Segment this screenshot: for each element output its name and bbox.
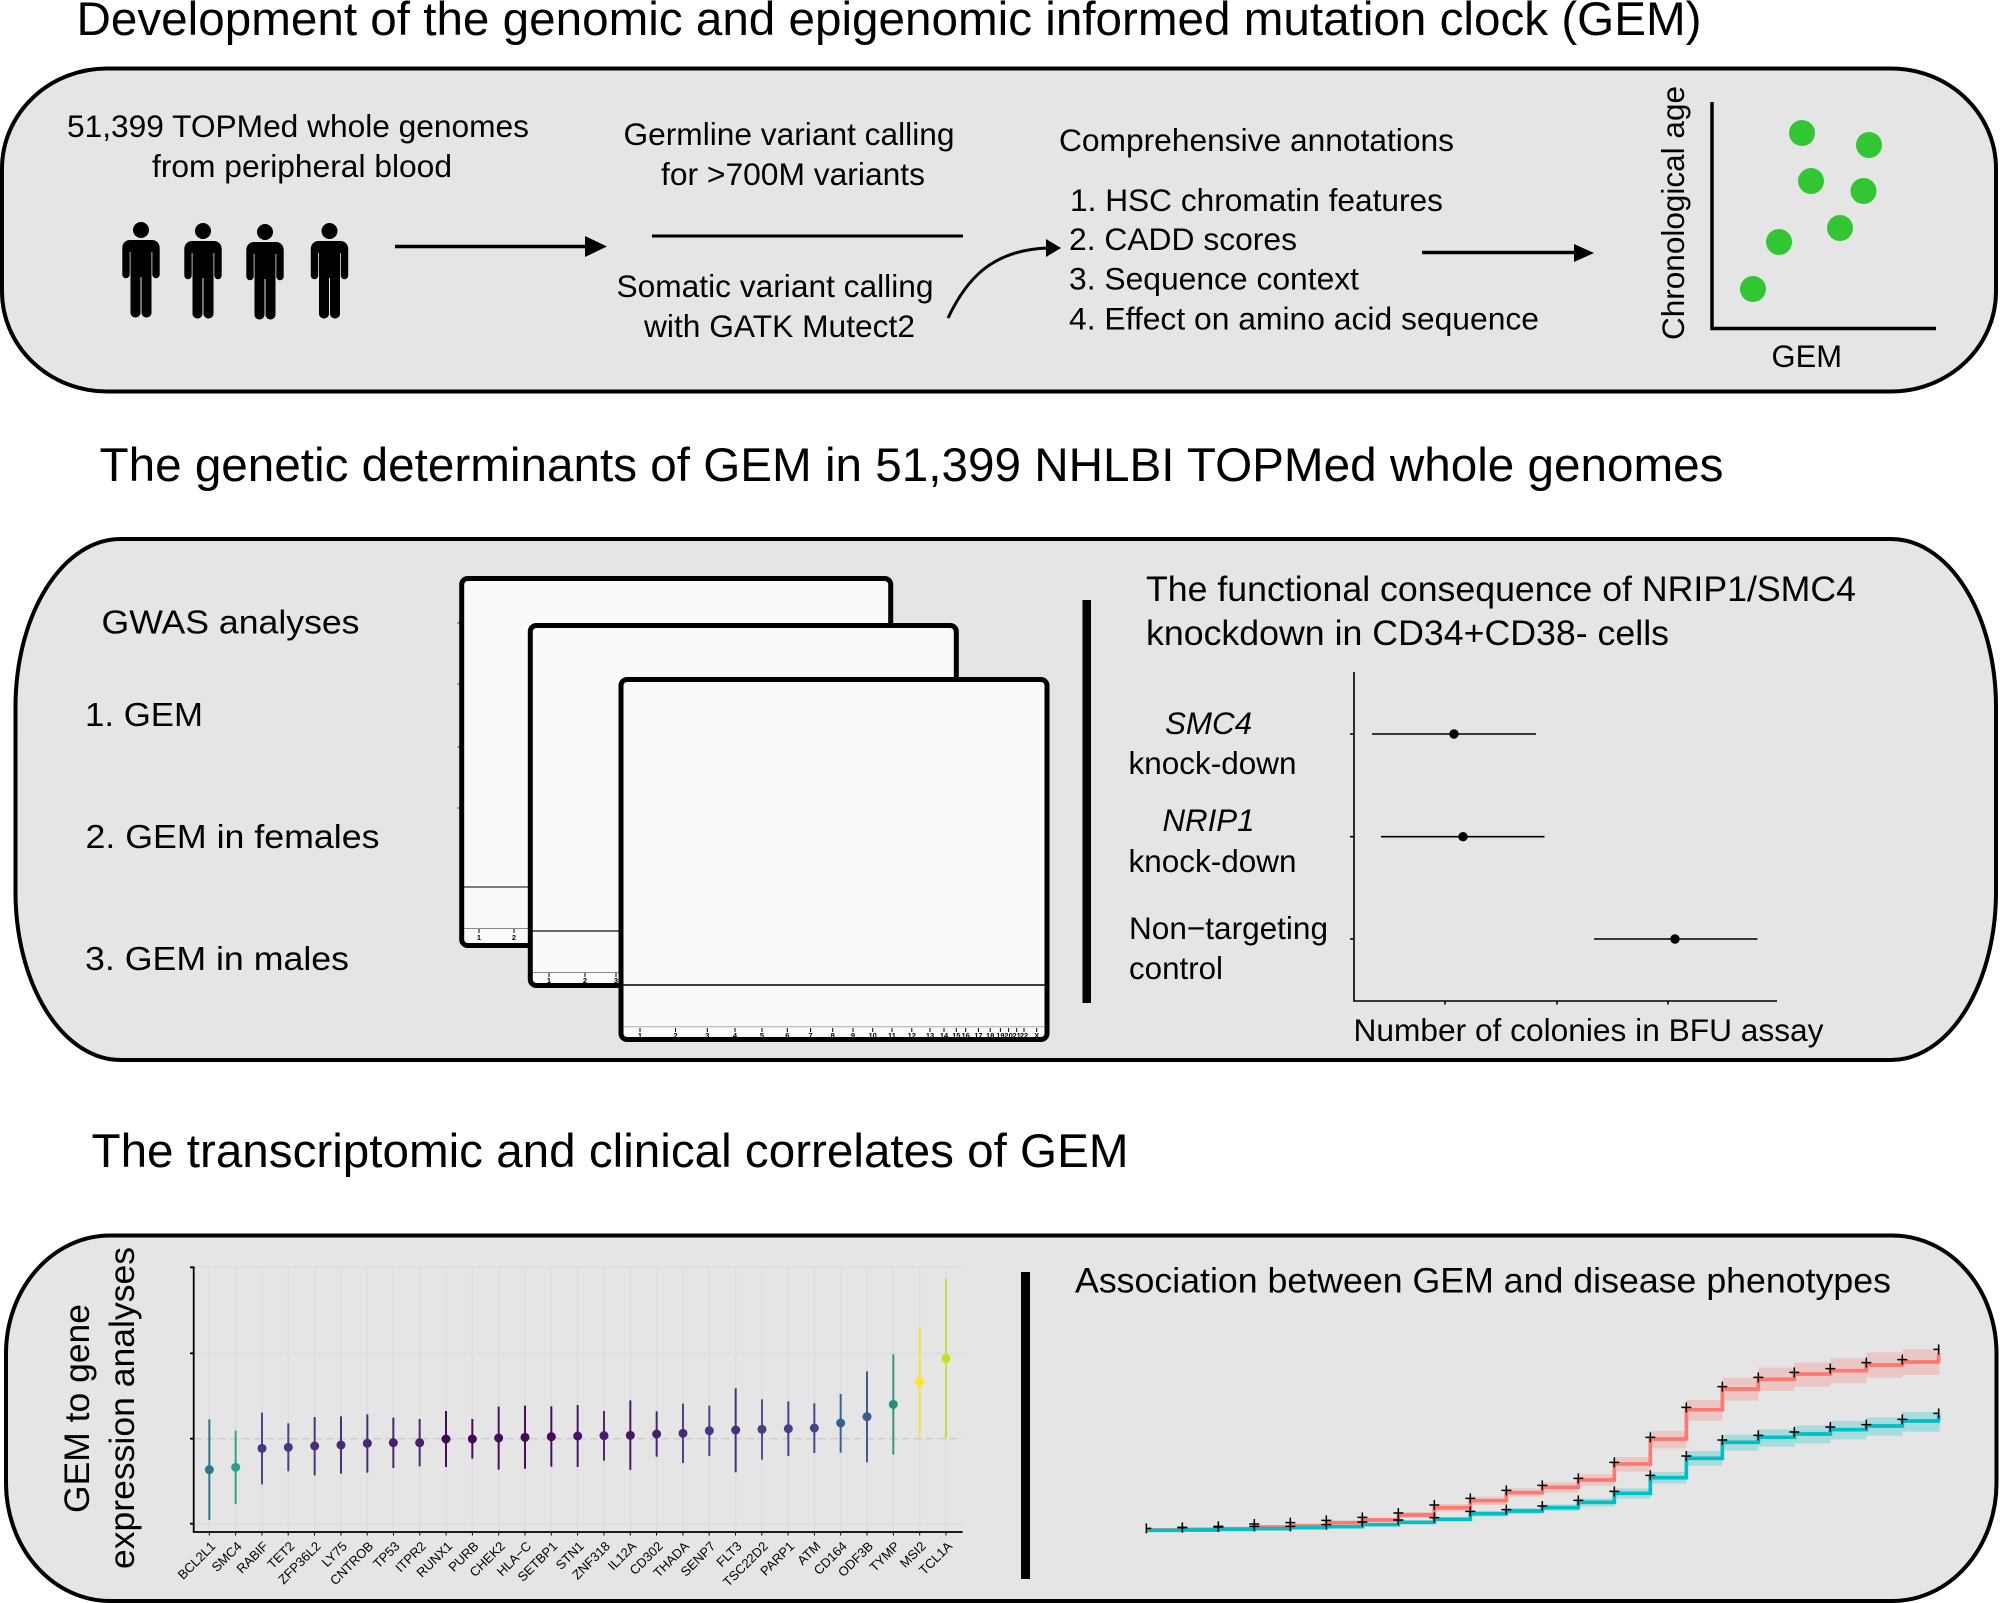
x axis label: Number of colonies in BFU assay	[1354, 1012, 1824, 1048]
gene: ZNF318	[599, 1411, 608, 1461]
grid lines	[194, 1267, 963, 1532]
chart: Manhattan plot card 1: 2	[512, 933, 516, 942]
text: GWAS analyses list: 3. GEM in males	[85, 940, 349, 977]
gene labels: MSI2	[897, 1539, 929, 1571]
gene: CNTROB	[363, 1414, 372, 1473]
gene: TSC22D2	[757, 1399, 766, 1460]
chart: chronological age versus GEM scatter	[1655, 86, 1936, 374]
chromosome labels: 6	[785, 1031, 789, 1040]
chromosome labels: X	[1034, 1031, 1039, 1040]
divider between germline and somatic	[652, 234, 963, 238]
x axis label: GEM	[1772, 338, 1842, 374]
gene labels: STN1	[553, 1539, 587, 1573]
gene labels: LY75	[319, 1539, 350, 1570]
text: comprehensive annotations list: 3. Sequence context	[1069, 260, 1359, 296]
gene labels: CHEK2	[467, 1539, 508, 1580]
chromosome labels: 8	[831, 1031, 835, 1040]
heading: association with disease phenotypes: Association between GEM and disease phenotypes	[1075, 1260, 1891, 1300]
gene labels: PURB	[445, 1539, 482, 1575]
chromosome labels: 14	[940, 1031, 949, 1040]
gene labels: TCL1A	[916, 1538, 955, 1578]
gene labels: ODF3B	[835, 1539, 876, 1580]
gene labels: CD302	[626, 1539, 666, 1578]
gene labels: CD164	[811, 1539, 850, 1578]
gene labels: ZNF318	[569, 1539, 613, 1582]
estimate: non-targeting control	[1594, 934, 1758, 944]
heading: functional consequence	[1146, 569, 1856, 653]
arrow: annotations to scatter	[1422, 244, 1594, 262]
row label: NRIP1: NRIP1	[1162, 802, 1254, 838]
gene labels: BCL2L1	[175, 1539, 218, 1582]
arrow: genomes to variant calling	[395, 236, 607, 257]
gene: TET2	[284, 1423, 293, 1471]
row label: control: Non−targeting	[1129, 910, 1328, 946]
gene: TYMP	[889, 1354, 898, 1455]
gene labels: SETBP1	[515, 1539, 560, 1584]
heading: genetic determinants: The genetic determinants of GEM in 51,399 NHLBI TOPMed whole genomes	[100, 439, 1724, 492]
heading: transcriptomic and clinical correlates: The transcriptomic and clinical correlates of GEM	[92, 1125, 1128, 1178]
gene: ODF3B	[862, 1371, 871, 1462]
chromosome labels: 13	[926, 1031, 934, 1040]
confidence band: red group	[1146, 1349, 1940, 1531]
gene labels	[175, 1538, 955, 1589]
gene labels: SENP7	[678, 1539, 718, 1579]
chart: Manhattan plot card 2: 3	[614, 976, 618, 985]
chart: Manhattan plot card 2: 2	[583, 976, 587, 985]
text: somatic variant calling	[616, 268, 934, 344]
gene labels: FLT3	[713, 1539, 745, 1570]
text: GWAS analyses list: 1. GEM	[85, 696, 203, 733]
row label: control: control	[1129, 950, 1223, 986]
text: germline variant calling: Germline variant calling	[624, 116, 954, 152]
estimate: SMC4	[1372, 729, 1536, 739]
vertical divider panel 2	[1082, 600, 1091, 1003]
icon: four people	[122, 222, 348, 320]
row label: SMC4: knock-down	[1128, 745, 1296, 781]
row label: SMC4	[1128, 705, 1296, 781]
chart: Manhattan plot card 3	[621, 680, 1047, 1040]
gene labels: RABIF	[233, 1538, 271, 1576]
text: germline variant calling: for >700M variants	[661, 156, 925, 192]
gene: PARP1	[784, 1401, 793, 1456]
chromosome labels: 11	[888, 1031, 896, 1040]
gene: TCL1A	[941, 1279, 950, 1438]
text: somatic variant calling: with GATK Mutect2	[643, 308, 915, 344]
gene: BCL2L1	[205, 1419, 214, 1520]
gene: CD302	[652, 1411, 661, 1457]
gene labels: THADA	[650, 1538, 692, 1580]
text: comprehensive annotations list: 1. HSC chromatin features	[1070, 182, 1443, 218]
text: GWAS analyses list: GWAS analyses	[102, 604, 360, 640]
gene labels: TP53	[370, 1539, 403, 1571]
gene: LY75	[336, 1416, 345, 1474]
chart: cumulative incidence curves	[1146, 1344, 1940, 1533]
chromosome labels: 17	[974, 1031, 983, 1040]
y label: GEM to gene expression analyses: GEM to gene	[57, 1304, 97, 1513]
row label: NRIP1: knock-down	[1128, 843, 1296, 879]
chart: Manhattan plot card 1	[458, 578, 891, 946]
chromosome labels: 19	[996, 1031, 1005, 1040]
heading: functional consequence: knockdown in CD34+CD38- cells	[1146, 613, 1669, 653]
chart: colonies in BFU assay forest plot	[1128, 672, 1824, 1048]
text: whole genomes source: from peripheral blood	[152, 148, 452, 184]
gene: ITPR2	[415, 1419, 424, 1466]
vertical divider panel 3	[1021, 1272, 1030, 1579]
text: somatic variant calling: Somatic variant calling	[616, 268, 934, 304]
confidence band: teal group	[1146, 1412, 1940, 1531]
chromosome labels: 12	[908, 1031, 916, 1040]
gene: RABIF	[257, 1413, 266, 1484]
text: GWAS analyses list	[85, 604, 380, 977]
gene: CHEK2	[494, 1407, 503, 1470]
gene: CD164	[836, 1394, 845, 1453]
chromosome labels: 15	[952, 1031, 960, 1040]
gene: RUNX1	[441, 1411, 450, 1467]
panel: transcriptomic and clinical correlates	[6, 1236, 1996, 1601]
chromosome labels: 4	[733, 1031, 738, 1040]
gene labels: TSC22D2	[720, 1539, 771, 1589]
axes	[190, 1267, 963, 1532]
chart: Manhattan plot card 2	[530, 626, 956, 986]
scatter points	[1740, 120, 1882, 302]
panel: genetic determinants	[16, 539, 1996, 1060]
gene labels: CNTROB	[327, 1539, 376, 1588]
gene: STN1	[573, 1405, 582, 1467]
chart: Manhattan plot card 2: 1	[547, 976, 551, 985]
gene labels: HLA−C	[494, 1539, 534, 1579]
text: germline variant calling	[624, 116, 954, 192]
chromosome labels: 10	[869, 1031, 877, 1040]
y label: GEM to gene expression analyses: expression analyses	[102, 1247, 142, 1569]
point ranges	[205, 1279, 950, 1520]
gene labels: RUNX1	[413, 1539, 455, 1580]
gene: SENP7	[705, 1406, 714, 1456]
text: comprehensive annotations list: 2. CADD scores	[1069, 221, 1297, 257]
chromosome labels: 21	[1013, 1031, 1021, 1040]
gene: SETBP1	[547, 1406, 556, 1467]
gene labels: SMC4	[209, 1539, 245, 1575]
axes	[1350, 672, 1777, 1004]
censor marks: red group	[1146, 1344, 1940, 1533]
curve: teal group	[1146, 1415, 1940, 1530]
gene labels: IL12A	[605, 1538, 640, 1573]
text: GWAS analyses list: 2. GEM in females	[86, 818, 380, 855]
curve: red group	[1146, 1353, 1940, 1530]
gene: ATM	[810, 1403, 819, 1453]
gene labels: ITPR2	[392, 1539, 429, 1575]
gene: PURB	[468, 1419, 477, 1459]
gene: FLT3	[731, 1388, 740, 1472]
chromosome labels: 22	[1020, 1031, 1028, 1040]
chart: GEM to gene expression point ranges	[175, 1267, 963, 1589]
text: comprehensive annotations list	[1059, 122, 1539, 336]
chromosome labels: 9	[851, 1031, 855, 1040]
y axis label: Chronological age	[1655, 86, 1691, 340]
chart: Manhattan plot card 1: 1	[477, 933, 481, 942]
arrow: curved somatic to annotations	[948, 239, 1061, 318]
row label: NRIP1	[1128, 802, 1296, 879]
text: comprehensive annotations list: 4. Effect on amino acid sequence	[1069, 300, 1539, 336]
y label: GEM to gene expression analyses	[57, 1247, 142, 1569]
estimate: NRIP1	[1381, 832, 1544, 841]
gene: SMC4	[231, 1431, 240, 1504]
chromosome labels: 16	[962, 1031, 970, 1040]
gene: HLA-C	[520, 1406, 529, 1469]
gene labels: PARP1	[757, 1539, 797, 1579]
row label: SMC4: SMC4	[1165, 705, 1252, 741]
censor marks: teal group	[1177, 1408, 1940, 1533]
chromosome labels: 2	[673, 1031, 678, 1040]
heading: functional consequence: The functional consequence of NRIP1/SMC4	[1146, 569, 1856, 609]
gene labels: TYMP	[866, 1539, 903, 1575]
chromosome labels: 20	[1004, 1031, 1013, 1040]
gene labels: ZFP36L2	[275, 1539, 324, 1587]
gene: MSI2	[915, 1328, 924, 1437]
gene labels: ATM	[794, 1539, 824, 1568]
x tick marks	[209, 1532, 946, 1536]
chromosome labels: 18	[986, 1031, 994, 1040]
chromosome labels: 3	[705, 1031, 709, 1040]
chromosome labels: 5	[760, 1031, 764, 1040]
chromosome labels: 7	[809, 1031, 813, 1040]
text: whole genomes source	[67, 108, 529, 184]
chromosome labels: 1	[638, 1031, 642, 1040]
row label: control	[1129, 910, 1328, 986]
gene: THADA	[678, 1404, 687, 1463]
panel: GEM development pipeline	[2, 68, 1996, 392]
text: comprehensive annotations list: Comprehensive annotations	[1059, 122, 1454, 158]
text: whole genomes source: 51,399 TOPMed whole genomes	[67, 108, 529, 144]
chromosome labels	[638, 1031, 1039, 1040]
gene labels: TET2	[264, 1539, 297, 1572]
gene: ZFP36L2	[310, 1417, 319, 1475]
gene: IL12A	[626, 1400, 635, 1470]
gene: TP53	[389, 1418, 398, 1468]
